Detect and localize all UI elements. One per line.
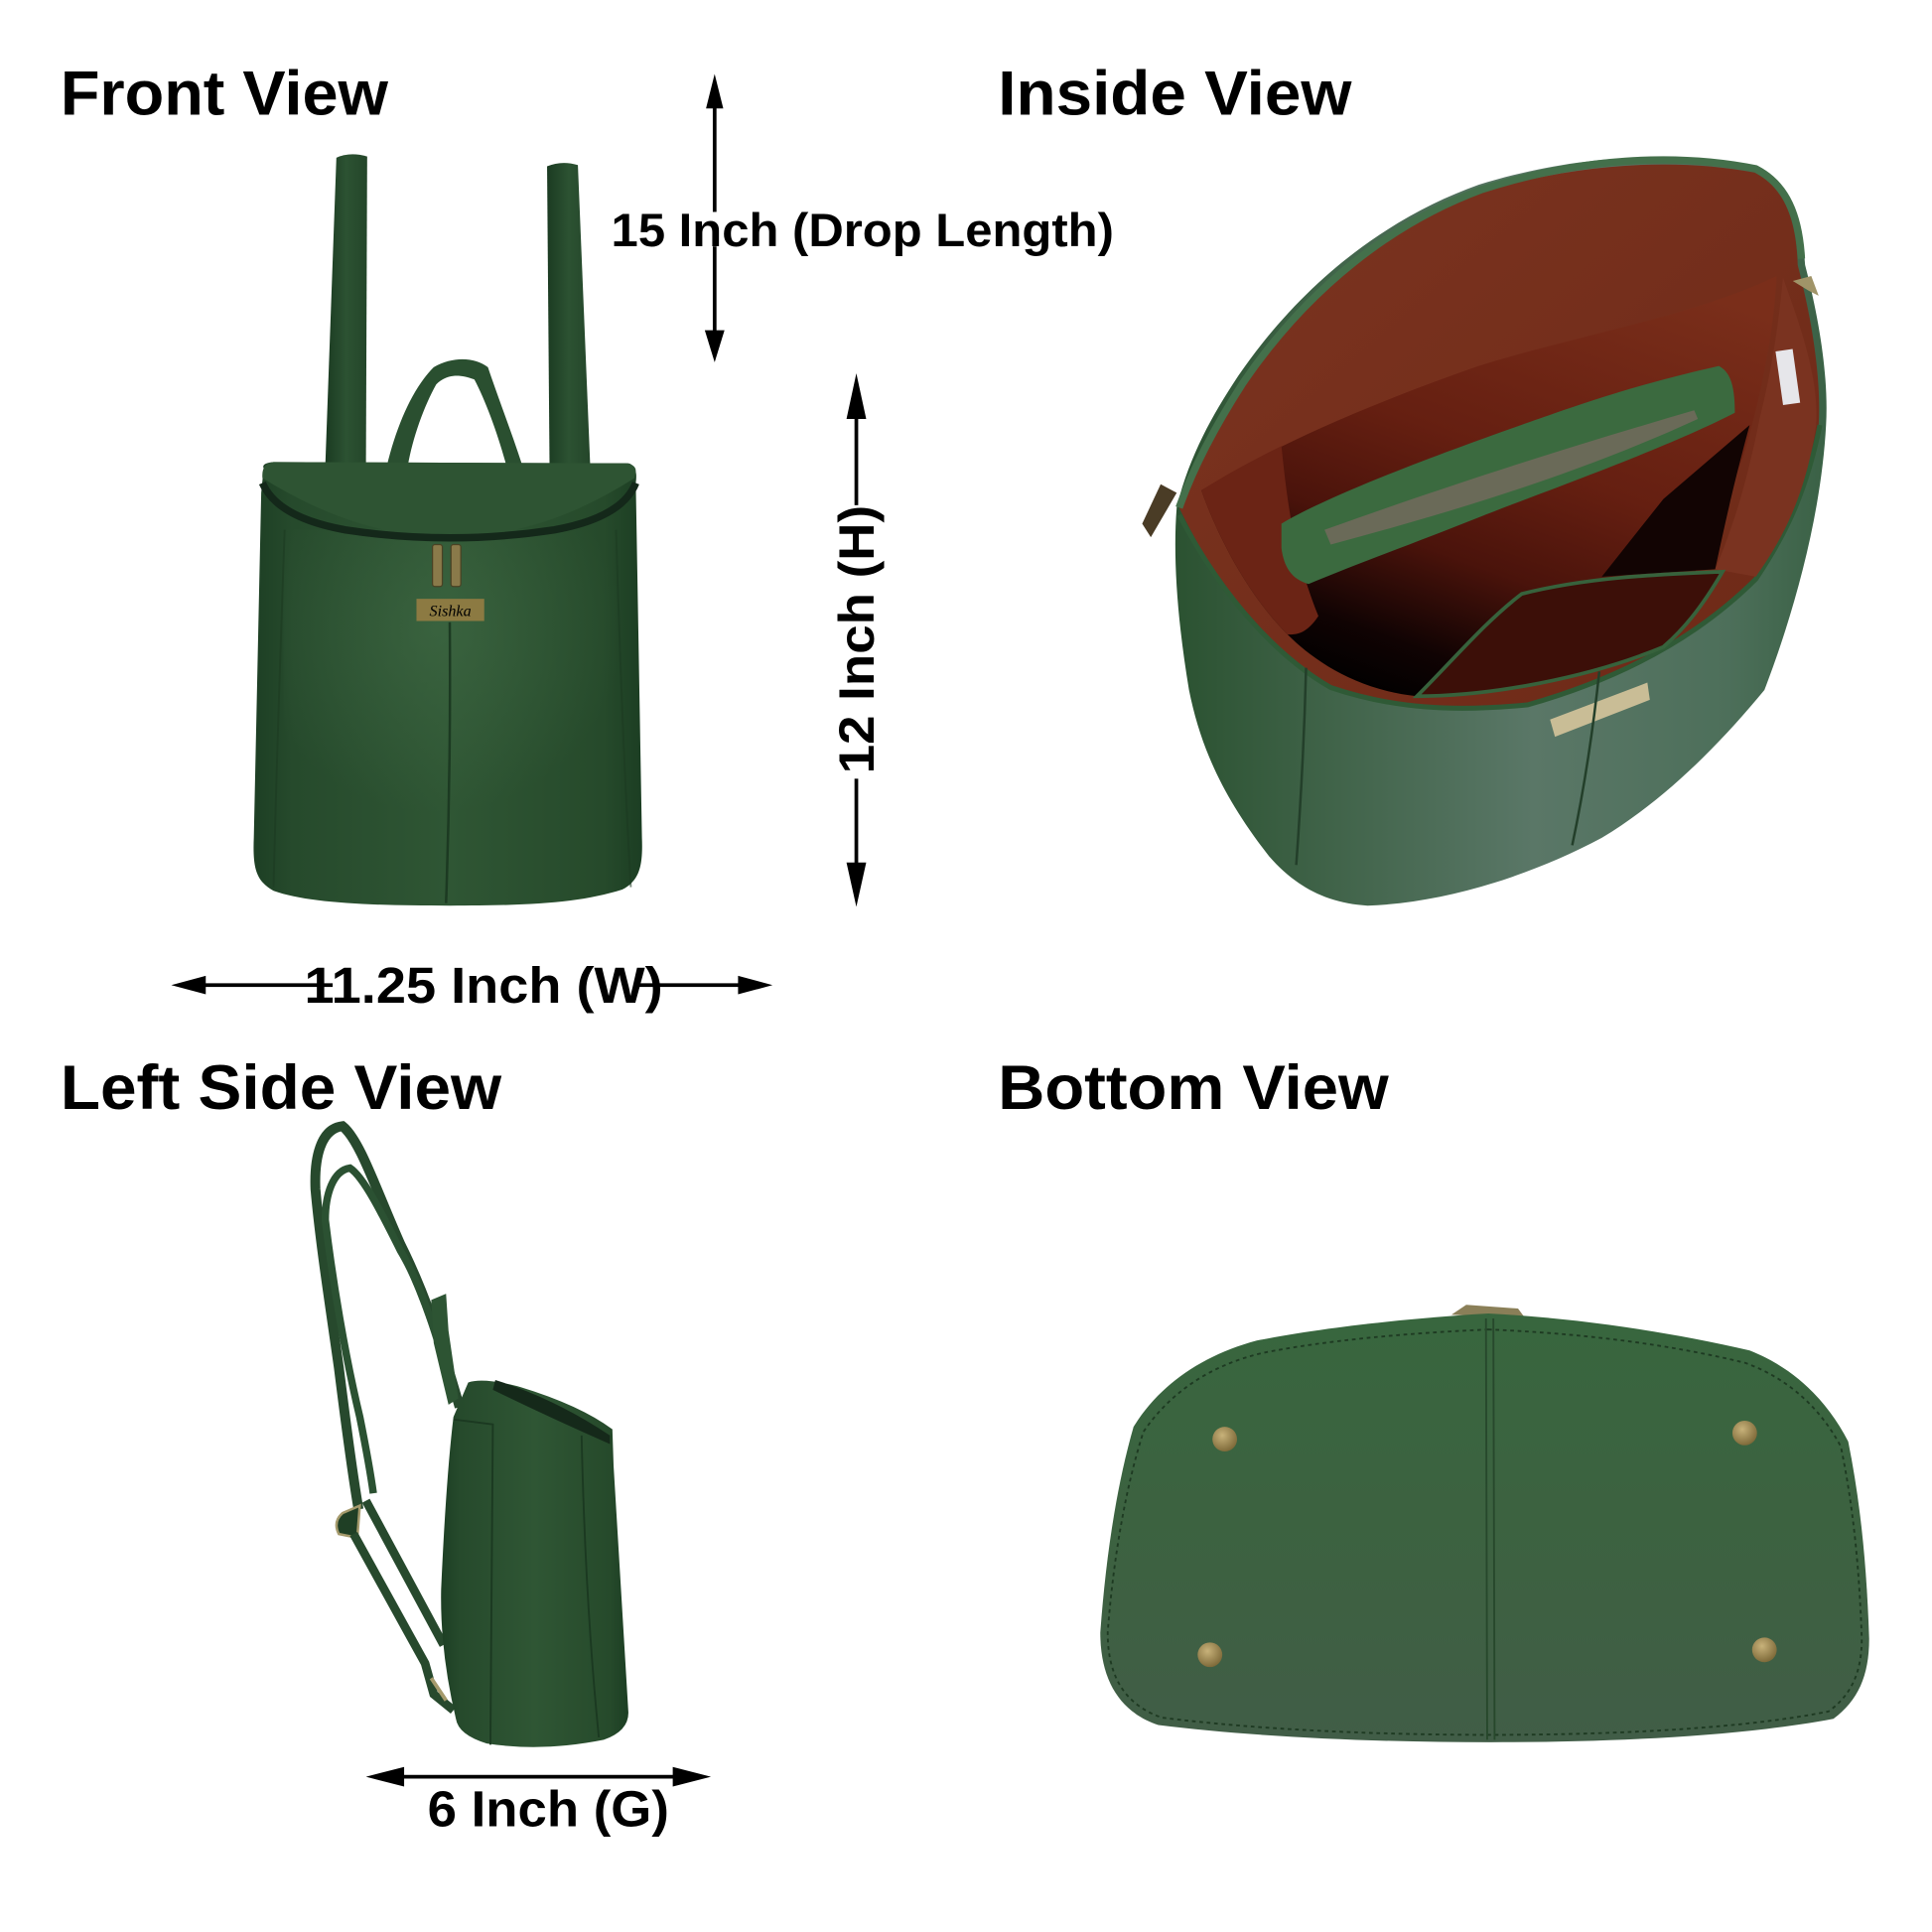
interior lining	[1179, 165, 1819, 708]
dimension: width arrow	[172, 976, 772, 995]
title: Inside View: Inside View	[998, 59, 1352, 128]
panel: left side view	[316, 1126, 628, 1747]
top flap	[262, 462, 635, 537]
lower buckle	[431, 1678, 446, 1701]
title: Left Side View: Left Side View	[61, 1053, 502, 1123]
back wall fabric	[1201, 276, 1777, 696]
label: gusset: 6 Inch (G)	[428, 1780, 669, 1837]
pocket zip slit	[1324, 410, 1698, 545]
brand badge	[416, 599, 484, 621]
brand badge: Sishka	[430, 604, 472, 621]
title: Front View: Front View	[61, 59, 389, 128]
side seams	[454, 1420, 599, 1744]
rivet	[1732, 1421, 1757, 1446]
rivet	[1212, 1427, 1237, 1451]
panel: inside view	[1142, 157, 1827, 905]
handle tab	[431, 1294, 459, 1405]
lower zipper edge	[1179, 425, 1820, 708]
panel: front view backpack	[253, 154, 642, 905]
left zipper pull	[1142, 484, 1176, 537]
bag body	[253, 462, 642, 905]
rivet	[1197, 1642, 1222, 1667]
label: height: 12 Inch (H)	[829, 505, 885, 773]
lower straps	[353, 1501, 454, 1711]
rivet	[1752, 1637, 1777, 1662]
body highlight	[283, 530, 622, 863]
label: drop length: 15 Inch (Drop Length)	[612, 204, 1114, 256]
exterior badge	[1550, 683, 1650, 737]
zipper edge	[1179, 160, 1801, 507]
center seam	[446, 622, 450, 903]
left wall lining strip	[1201, 446, 1318, 634]
title: Bottom View: Bottom View	[998, 1053, 1389, 1123]
exterior seams	[1297, 668, 1599, 865]
left shoulder strap	[326, 154, 367, 466]
side seams	[274, 530, 630, 888]
right zipper pull	[1793, 276, 1819, 296]
outer strap loop	[316, 1126, 460, 1509]
lower pocket	[1417, 572, 1723, 696]
zipper pocket trim	[1282, 366, 1734, 584]
top handle	[387, 359, 522, 466]
side zipper	[492, 1380, 610, 1445]
buckle	[337, 1506, 359, 1538]
dark interior corner	[1601, 425, 1749, 577]
bag base	[1100, 1313, 1869, 1742]
center seam	[1486, 1318, 1494, 1739]
outer bag exterior	[1175, 157, 1827, 905]
dimension: gusset arrow	[366, 1767, 711, 1787]
care tag	[1775, 349, 1800, 405]
label: width: 11.25 Inch (W)	[305, 957, 663, 1014]
right shoulder strap	[547, 163, 590, 466]
right side wall	[1716, 277, 1817, 577]
bag body side	[441, 1381, 628, 1747]
zipper line	[262, 483, 635, 538]
stitching	[1108, 1329, 1862, 1734]
inner strap loop	[326, 1169, 451, 1493]
dimension: height arrow	[847, 373, 866, 906]
zipper pulls	[433, 545, 461, 587]
dimension: drop length arrow	[705, 73, 725, 362]
panel: bottom view	[1100, 1305, 1869, 1742]
zipper peek	[1451, 1305, 1525, 1318]
